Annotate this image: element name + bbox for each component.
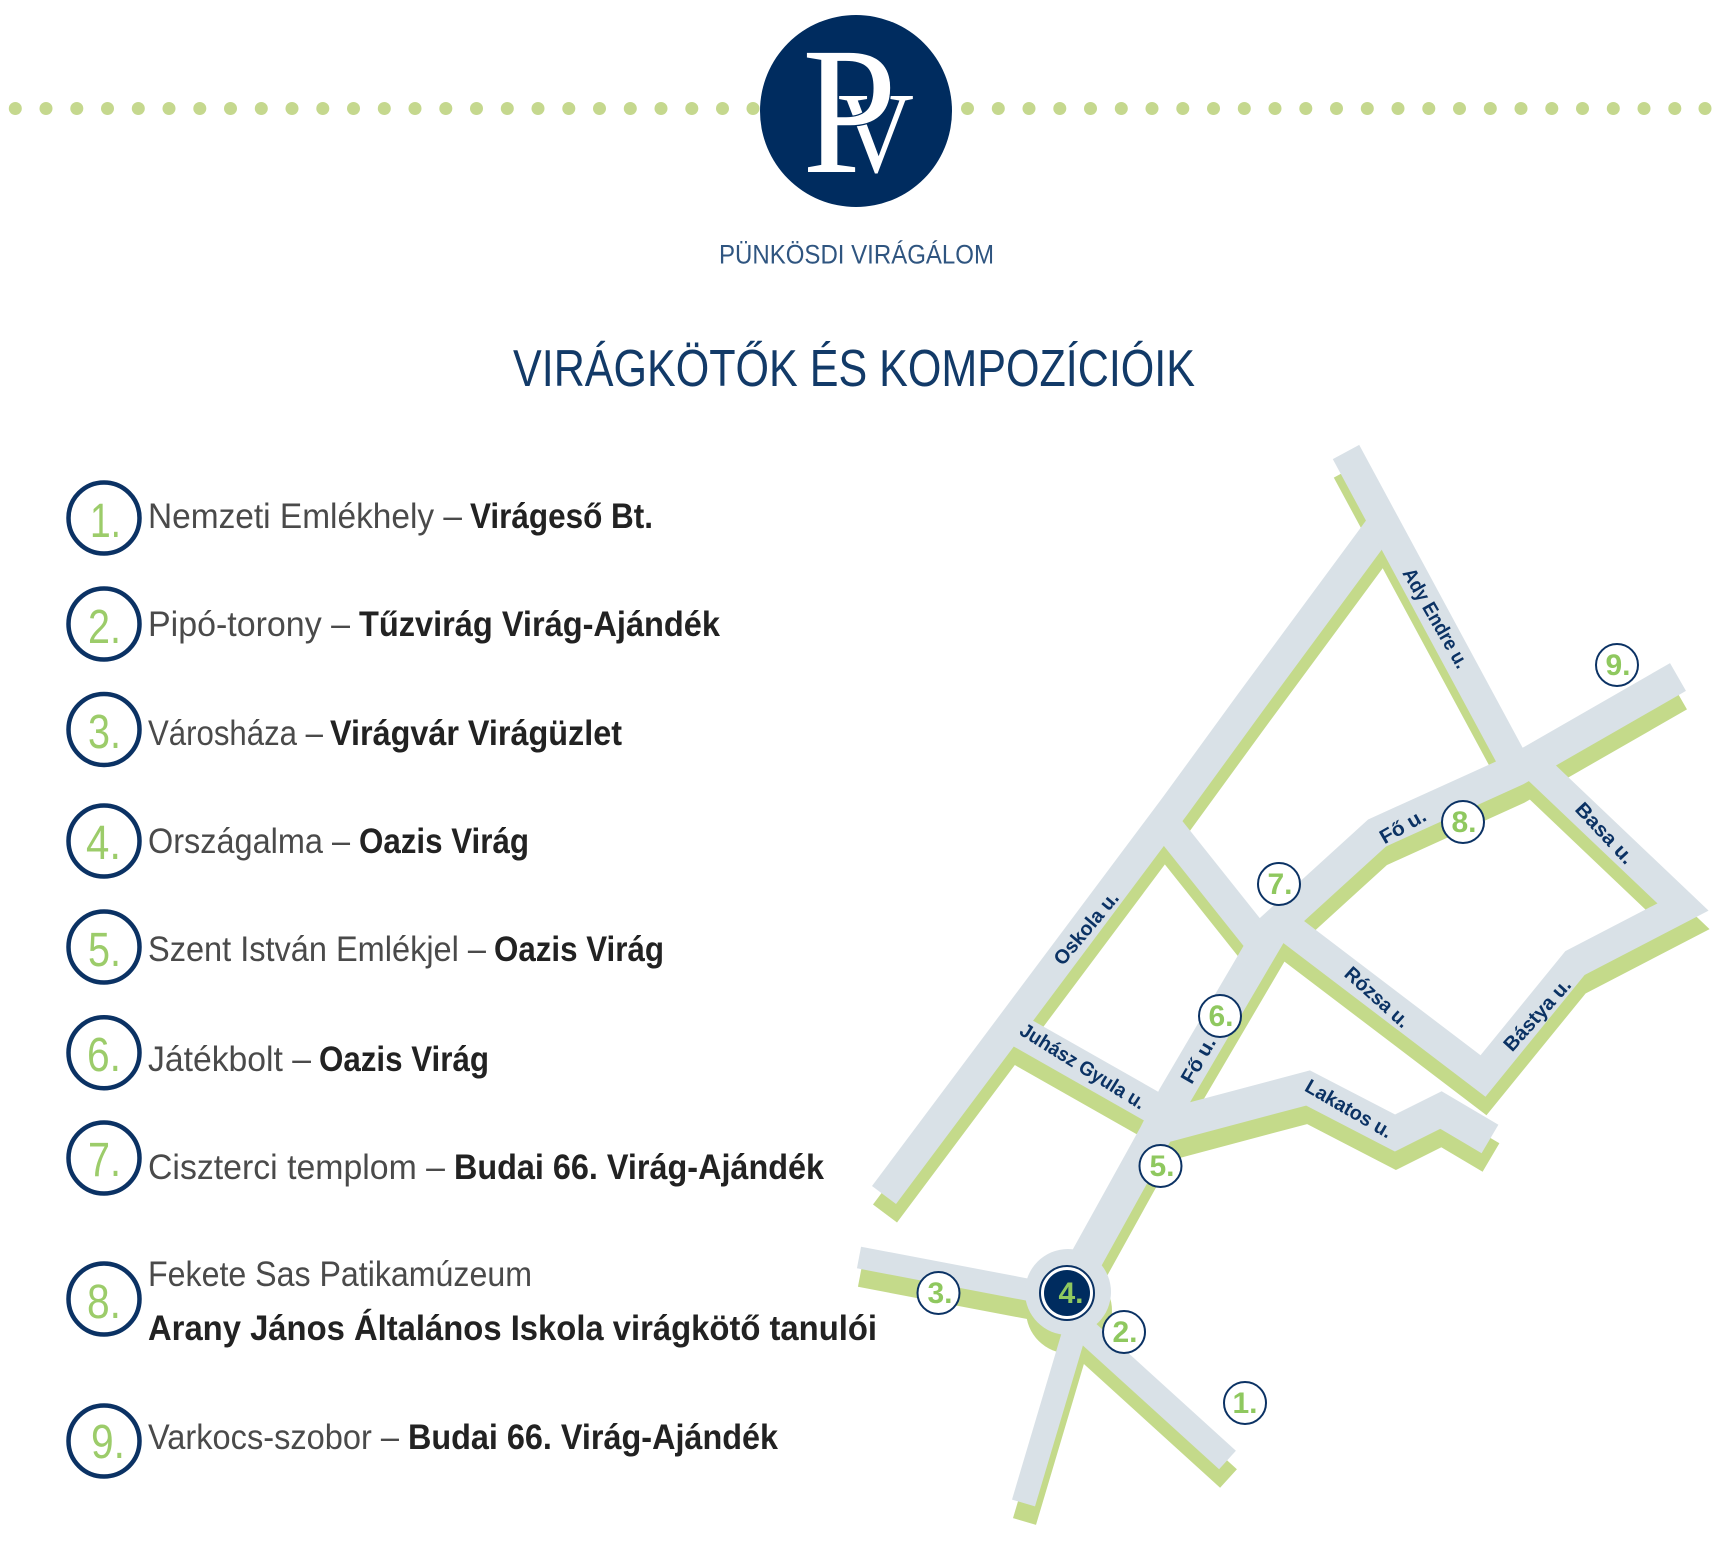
- list item 6: [68, 1017, 489, 1088]
- list item 7: [68, 1122, 824, 1194]
- list item 6: 6.: [87, 1029, 121, 1082]
- list item 3: 3.: [88, 706, 121, 759]
- logo: PV monogram: P: [802, 11, 897, 212]
- list item 9: Varkocs-szobor –: [148, 1418, 399, 1457]
- list item 6: Játékbolt –: [148, 1040, 312, 1079]
- road network: [859, 452, 1683, 1503]
- list item 7: Budai 66. Virág-Ajándék: [454, 1148, 824, 1187]
- list item 7: 7.: [88, 1134, 121, 1187]
- street labels: Ady Endre u.: [1398, 565, 1473, 672]
- map marker 7: [1258, 863, 1300, 905]
- map marker 2: [1103, 1311, 1145, 1353]
- list item 5: Oazis Virág: [494, 930, 664, 969]
- logo: PV monogram: V: [838, 70, 914, 197]
- list item 1: 1.: [90, 495, 121, 548]
- list item 2: Pipó-torony –: [148, 605, 351, 644]
- title: VIRÁGKÖTŐK ÉS KOMPOZÍCIÓIK: [513, 340, 1195, 398]
- logo: PV monogram: [760, 11, 952, 212]
- map marker 2: 2.: [1112, 1316, 1138, 1349]
- map marker 7: 7.: [1267, 868, 1293, 901]
- street labels: Juhász Gyula u.: [1016, 1019, 1149, 1114]
- map marker 1: [1224, 1382, 1266, 1424]
- list item 2: [68, 588, 720, 660]
- list item 1: Nemzeti Emlékhely –: [148, 497, 462, 536]
- list item 4: Országalma –: [148, 822, 350, 861]
- street labels: [1016, 565, 1638, 1143]
- list item 5: 5.: [88, 924, 121, 977]
- street labels: Oskola u.: [1050, 887, 1124, 970]
- map marker 5: [1140, 1145, 1182, 1187]
- list item 1: Virágeső Bt.: [470, 497, 653, 536]
- map marker 3: 3.: [927, 1277, 953, 1310]
- list item 8: [68, 1255, 877, 1348]
- list item 8: Fekete Sas Patikamúzeum: [148, 1255, 532, 1294]
- list item 6: Oazis Virág: [319, 1040, 489, 1079]
- street labels: Fő u.: [1376, 805, 1430, 849]
- map marker 9: [1596, 644, 1638, 686]
- street map: [859, 452, 1684, 1522]
- street labels: Rózsa u.: [1340, 963, 1414, 1033]
- road shadow network: [860, 470, 1684, 1522]
- list item 3: Virágvár Virágüzlet: [330, 714, 622, 753]
- list item 7: Ciszterci templom –: [148, 1148, 446, 1187]
- list item 4: [68, 806, 529, 876]
- street labels: Lakatos u.: [1301, 1076, 1396, 1143]
- list item 9: Budai 66. Virág-Ajándék: [408, 1418, 778, 1457]
- list item 3: [68, 694, 622, 765]
- map marker 4 highlighted: 4.: [1058, 1277, 1084, 1310]
- list of florists: [68, 482, 877, 1476]
- map marker 8: [1442, 801, 1484, 843]
- list item 1: [68, 482, 653, 554]
- list item 4: 4.: [86, 817, 121, 870]
- map marker 6: 6.: [1208, 1000, 1234, 1033]
- subtitle: PÜNKÖSDI VIRÁGÁLOM: [719, 240, 994, 270]
- map marker 1: 1.: [1232, 1387, 1258, 1420]
- list item 4: Oazis Virág: [359, 822, 529, 861]
- street labels: Basa u.: [1570, 798, 1638, 869]
- list item 3: Városháza –: [148, 714, 323, 753]
- map marker 5: 5.: [1149, 1150, 1175, 1183]
- list item 8: 8.: [87, 1276, 121, 1329]
- list item 2: Tűzvirág Virág-Ajándék: [359, 605, 720, 644]
- map marker 4 highlighted: [1040, 1266, 1094, 1320]
- dotted divider line: [9, 102, 1711, 115]
- list item 5: [68, 912, 664, 982]
- street labels: Bástya u.: [1499, 974, 1576, 1056]
- list item 5: Szent István Emlékjel –: [148, 930, 486, 969]
- map marker 8: 8.: [1451, 806, 1477, 839]
- list item 8: Arany János Általános Iskola virágkötő tanulói: [148, 1308, 877, 1348]
- list item 9: 9.: [91, 1416, 125, 1469]
- list item 2: 2.: [88, 601, 121, 654]
- map marker 3: [918, 1272, 960, 1314]
- map marker 6: [1199, 995, 1241, 1037]
- list item 9: [68, 1406, 778, 1476]
- map marker 9: 9.: [1605, 649, 1631, 682]
- street labels: Fő u.: [1177, 1033, 1221, 1088]
